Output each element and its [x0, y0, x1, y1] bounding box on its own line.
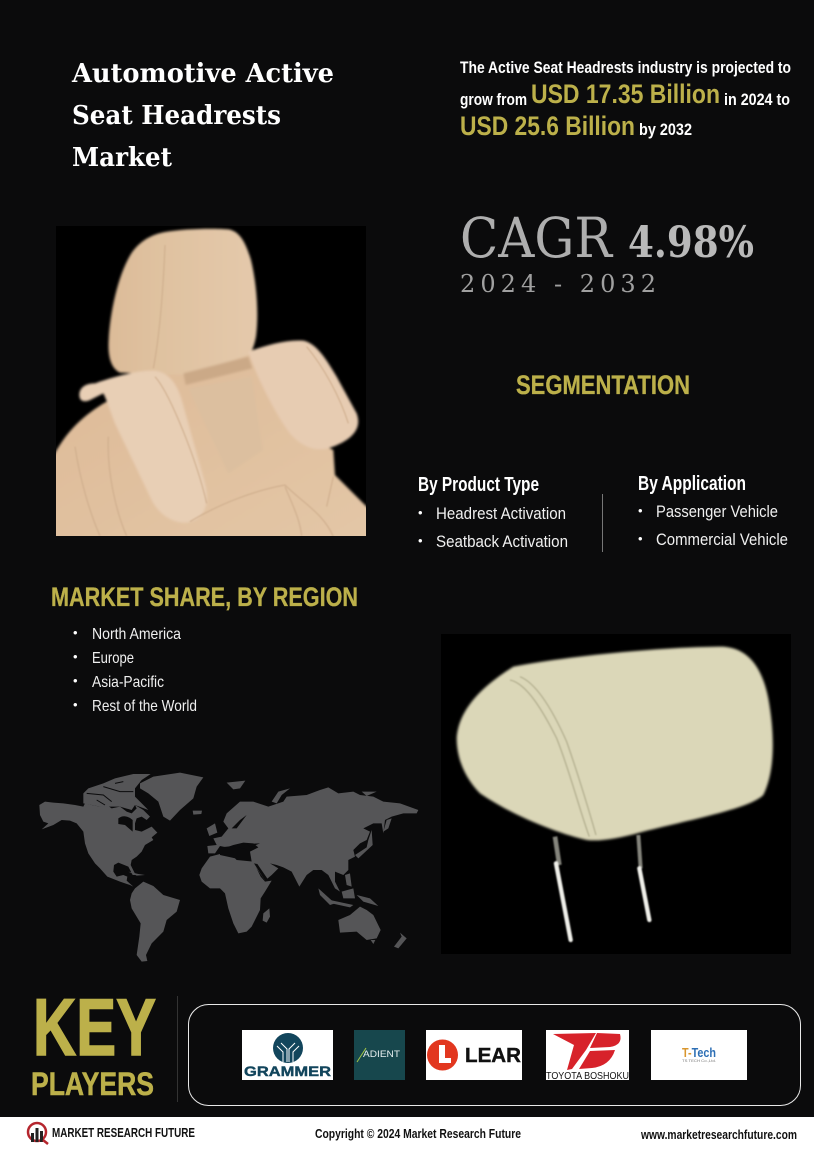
footer	[0, 1117, 814, 1150]
footer: Copyright © 2024 Market Research Future	[315, 1126, 521, 1141]
CAGR: CAGR	[460, 206, 613, 270]
segment: by product type: Headrest Activation	[436, 504, 566, 523]
logo: T-Tech: TS TECH Co.,Ltd.	[682, 1058, 716, 1063]
market size statement	[460, 58, 791, 141]
segment: by application: By Application	[638, 473, 746, 495]
region list: •	[73, 649, 78, 664]
region list: •	[73, 673, 78, 688]
image: seat with headrest	[50, 226, 373, 547]
logo: Adient	[354, 1030, 405, 1080]
logo: Grammer: GRAMMER	[244, 1063, 331, 1079]
segment: by product type: •	[418, 505, 423, 520]
heading: segmentation: SEGMENTATION	[516, 370, 690, 400]
CAGR: 2024 - 2032	[460, 270, 656, 298]
market size statement: by 2032	[639, 120, 692, 139]
region list: Asia-Pacific	[92, 674, 164, 691]
segment: by application: Passenger Vehicle	[656, 502, 778, 521]
panel: key player logos	[188, 1004, 800, 1106]
region list: Rest of the World	[92, 698, 197, 715]
segment: by product type: •	[418, 533, 423, 548]
region list: Europe	[92, 650, 134, 667]
CAGR: 4.98%	[628, 218, 754, 268]
market size statement: in 2024 to	[724, 90, 790, 109]
heading: key players	[31, 983, 156, 1102]
region list	[73, 625, 197, 715]
logo: Toyota Boshoku	[546, 1030, 629, 1082]
segment: by application: •	[638, 503, 643, 518]
logo: Adient: ADIENT	[363, 1049, 401, 1059]
logo: T-Tech: T-Tech	[682, 1045, 716, 1060]
footer: MARKET RESEARCH FUTURE	[52, 1125, 195, 1140]
heading: market share by region: MARKET SHARE, BY REGION	[51, 582, 358, 612]
CAGR	[460, 206, 754, 298]
logo: Lear	[426, 1030, 522, 1080]
world map	[39, 773, 418, 962]
segment: by product type: Seatback Activation	[436, 532, 568, 551]
segment: by product type: By Product Type	[418, 474, 539, 496]
title: Automotive Active	[71, 59, 334, 89]
market size statement: grow from	[460, 90, 527, 109]
region list: •	[73, 625, 78, 640]
segment: by application: •	[638, 531, 643, 546]
logo: Grammer	[242, 1030, 333, 1080]
logo: T-Tech	[651, 1030, 747, 1080]
segment: by application	[638, 473, 788, 549]
segment: by product type	[418, 474, 568, 551]
logo: Lear: LEAR	[465, 1045, 522, 1067]
region list: •	[73, 697, 78, 712]
segment: by application: Commercial Vehicle	[656, 530, 788, 549]
heading: key players: PLAYERS	[31, 1066, 154, 1102]
title	[71, 59, 334, 173]
market size statement: USD 25.6 Billion	[460, 111, 635, 141]
icon: market research future logo	[28, 1123, 48, 1144]
region list: North America	[92, 626, 181, 643]
logo: Toyota Boshoku: TOYOTA BOSHOKU	[546, 1071, 629, 1082]
heading: key players: KEY	[33, 983, 156, 1073]
image: detached headrest	[441, 634, 791, 954]
title: Market	[72, 143, 172, 173]
title: Seat Headrests	[72, 101, 281, 131]
market size statement: USD 17.35 Billion	[531, 79, 720, 109]
